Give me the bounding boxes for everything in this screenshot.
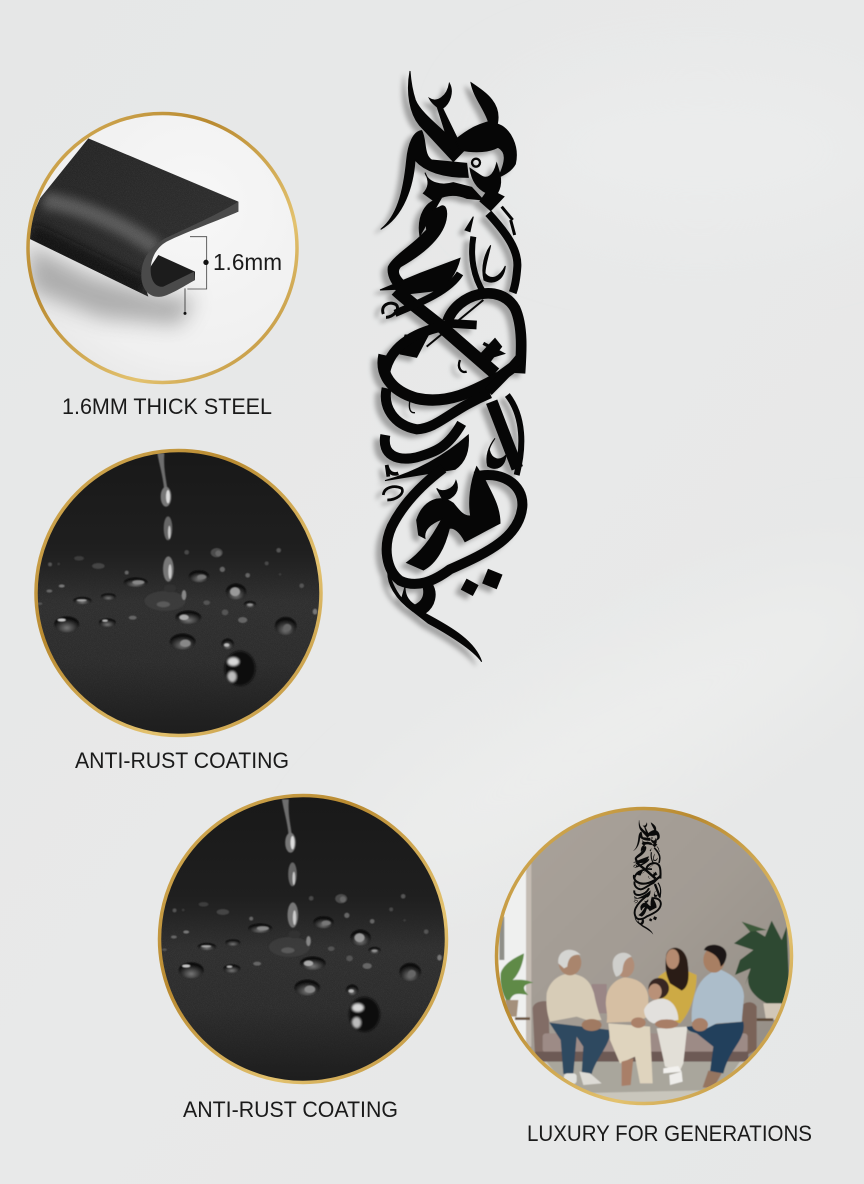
- caption: 1.6MM THICK STEEL: [62, 394, 272, 419]
- caption: LUXURY FOR GENERATIONS: [527, 1121, 812, 1146]
- dimension label: 1.6mm: [213, 249, 282, 275]
- caption: ANTI-RUST COATING: [75, 748, 289, 773]
- gold ring: [496, 808, 792, 1104]
- gold ring: [36, 450, 321, 736]
- steel sample photo: [30, 116, 295, 364]
- man left: [549, 1023, 610, 1074]
- water droplet photo: [161, 797, 445, 1081]
- sofa: [592, 984, 607, 1013]
- gold ring: [28, 114, 297, 382]
- caption: ANTI-RUST COATING: [183, 1097, 398, 1122]
- panel: luxury for generations: [490, 800, 812, 1146]
- miniature calligraphy on wall: [633, 820, 661, 934]
- panel: anti-rust coating centre: [154, 791, 454, 1122]
- man right: [687, 1022, 744, 1073]
- family living room photo: [498, 810, 790, 1102]
- woman yellow: [657, 971, 697, 1023]
- panel: anti-rust coating left: [30, 445, 330, 773]
- panel: 1.6mm steel thickness: [20, 105, 310, 419]
- gold ring: [160, 796, 446, 1082]
- child: [657, 1027, 687, 1071]
- water droplet photo: [38, 452, 320, 734]
- calligraphy wall art: [374, 71, 522, 666]
- woman grey hair: [608, 1023, 653, 1083]
